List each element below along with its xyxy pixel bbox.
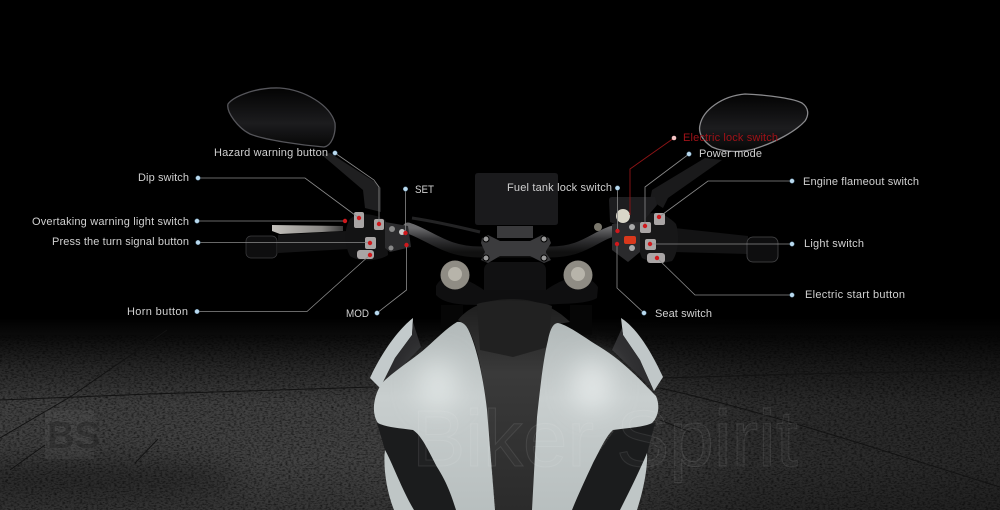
watermark: BS logo: BS [47,415,100,457]
right wing fairing [621,318,663,391]
right white tank panel [532,323,658,510]
callout: Dip switch: Dip switch [138,172,189,184]
left white tank panel [374,322,495,510]
callout: Power mode [643,148,762,228]
callout: Press the turn signal button [52,236,372,248]
callout: Seat switch: Seat switch [655,308,712,320]
callout: Fuel tank lock switch [507,182,620,233]
central dark strip [458,299,570,510]
lower white panels [384,450,414,510]
instrument screen [475,173,558,225]
callout: Overtaking warning light switch [32,216,347,228]
screen bracket [497,226,533,238]
callout: Hazard warning button [214,147,381,226]
callout: SET: SET [415,184,434,196]
callout: Engine flameout switch [657,176,919,219]
triple clamp and fork caps [436,260,598,335]
callout: Light switch: Light switch [804,238,864,250]
callout: Horn button: Horn button [127,306,188,318]
callout: Electric start button [655,256,905,301]
callout: Electric lock switch: Electric lock switch [683,132,778,144]
left wing fairing [370,318,413,388]
handlebar clamp [481,235,551,304]
callout: MOD: MOD [346,308,369,320]
lower black panels [377,423,458,510]
callout: Hazard warning button: Hazard warning button [214,147,328,159]
callout: Light switch [648,238,864,250]
callout: Engine flameout switch: Engine flameout switch [803,176,919,188]
left mirror [228,88,381,212]
callout: Press the turn signal button: Press the turn signal button [52,236,189,248]
callout: Seat switch [615,242,712,320]
callout: Fuel tank lock switch: Fuel tank lock switch [507,182,612,194]
callout: Power mode: Power mode [699,148,762,160]
asphalt ground [0,318,1000,510]
handlebar [408,218,617,252]
right mirror [650,94,808,208]
callout: Horn button [127,253,372,318]
callout: MOD [346,243,409,320]
right grip and switch housing [594,197,778,263]
callout: Electric lock switch [630,132,778,215]
wing inner shadows [381,322,421,388]
watermark: Biker Spirit: Biker Spirit [412,394,798,483]
callout: Electric start button: Electric start button [805,289,905,301]
callout: SET [403,184,434,235]
highlights [418,359,458,411]
callout: Overtaking warning light switch: Overtaking warning light switch [32,216,189,228]
callout: Dip switch [138,172,361,220]
left grip and switch housing [246,212,411,260]
tank and bodywork [370,299,663,510]
